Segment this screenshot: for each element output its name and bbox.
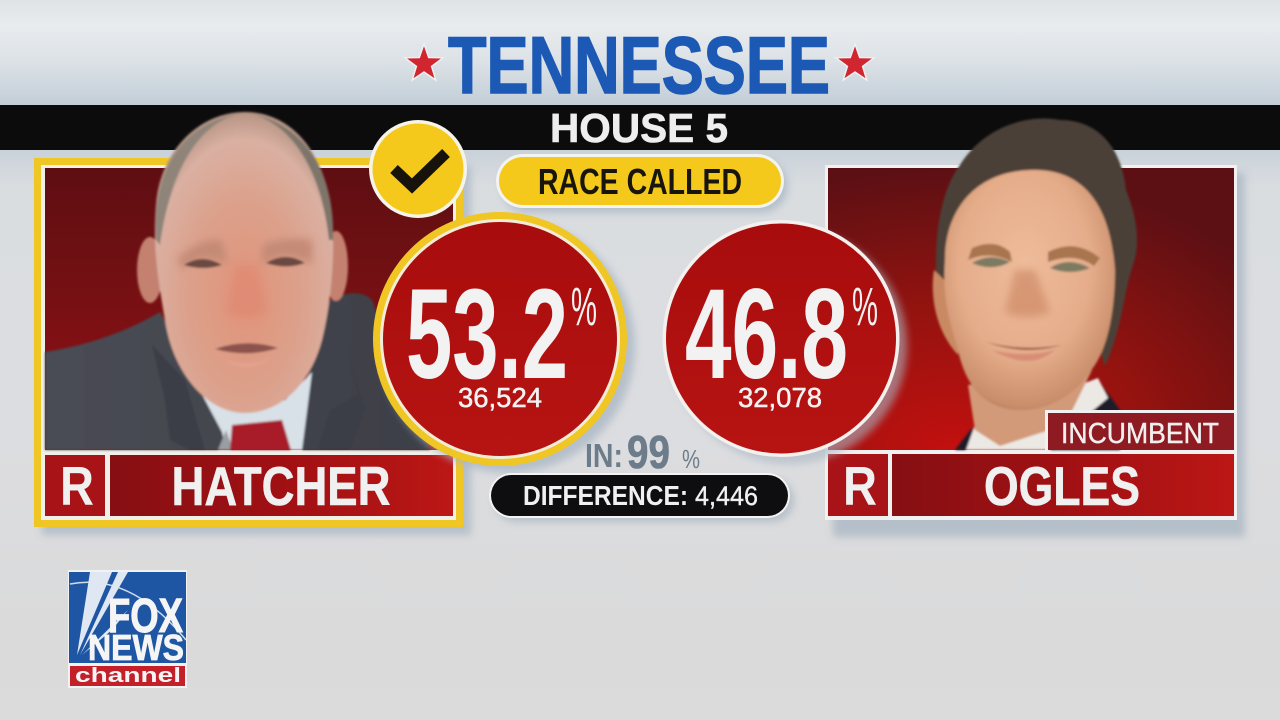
top banner xyxy=(0,0,1280,105)
race called pill: RACE CALLED xyxy=(538,161,742,202)
portrait: Hatcher xyxy=(45,112,430,450)
logo: Fox News channel: channel xyxy=(75,665,181,687)
portrait: Ogles xyxy=(933,118,1137,450)
difference pill: 4,446 xyxy=(695,481,758,511)
race called pill xyxy=(496,154,788,213)
name: Hatcher: HATCHER xyxy=(172,455,390,517)
logo: Fox News channel: FOX xyxy=(108,590,183,643)
result circle: Ogles: % xyxy=(852,277,878,337)
incumbent tag: INCUMBENT xyxy=(1061,418,1219,450)
result circle: Ogles: 46.8 xyxy=(685,263,848,406)
heading bar: House 5 xyxy=(0,105,1280,151)
percent in: % xyxy=(682,444,700,474)
party badge: R xyxy=(843,455,877,517)
title: Tennessee: TENNESSEE xyxy=(448,21,830,111)
logo: Fox News channel: NEWS xyxy=(88,627,184,668)
result circle: Ogles: 32,078 xyxy=(738,382,822,413)
result circle: Hatcher xyxy=(373,212,635,473)
percent in: 99 xyxy=(627,426,670,478)
percent in: IN: xyxy=(585,437,623,474)
difference pill xyxy=(489,473,794,522)
difference pill: DIFFERENCE: xyxy=(523,480,688,511)
name: Ogles: OGLES xyxy=(984,455,1140,517)
percent in xyxy=(585,426,700,478)
party badge: R xyxy=(60,455,94,517)
result circle: Ogles xyxy=(662,220,907,464)
result circle: Hatcher: % xyxy=(571,277,597,337)
result circle: Hatcher: 53.2 xyxy=(406,263,568,406)
panel: Hatcher candidate xyxy=(34,112,471,535)
result circle: Hatcher: 36,524 xyxy=(458,382,542,413)
panel: Ogles candidate xyxy=(825,118,1245,537)
check badge xyxy=(369,120,467,218)
logo: Fox News channel xyxy=(68,570,187,688)
heading bar: House 5: HOUSE 5 xyxy=(550,105,728,151)
